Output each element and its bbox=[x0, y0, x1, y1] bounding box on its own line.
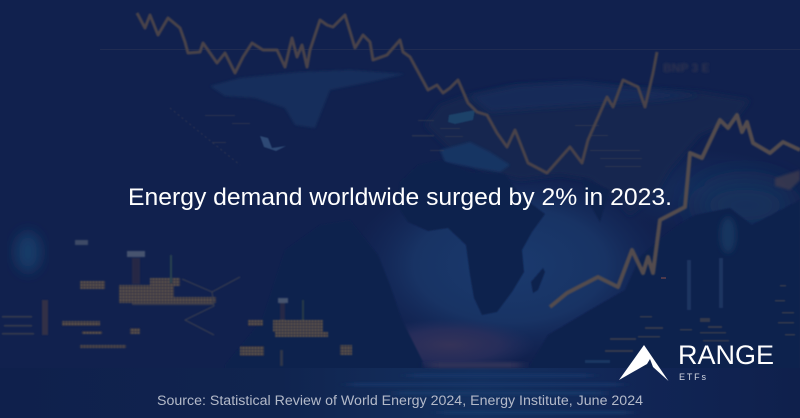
map: arctic islands bbox=[210, 70, 405, 128]
map: black sea bbox=[448, 110, 475, 124]
right coast and city silhouette bbox=[528, 200, 800, 372]
headline: Energy demand worldwide surged by 2% in 2023. bbox=[128, 184, 672, 211]
logo mountain icon bbox=[619, 345, 668, 381]
map: india bbox=[582, 178, 610, 222]
map: great lakes bbox=[260, 136, 286, 151]
map: madagascar bbox=[531, 268, 545, 293]
warm horizon glow bbox=[430, 362, 520, 368]
blue smoke plume bbox=[15, 232, 41, 272]
orange accent at right bbox=[775, 170, 800, 190]
faint horizontal line bbox=[100, 49, 800, 50]
logo subtitle: ETFs bbox=[679, 372, 706, 382]
map: siberia highlight bbox=[470, 82, 700, 112]
second stock chart line: rising on the right bbox=[550, 115, 800, 307]
logo: Range ETFs bbox=[619, 340, 774, 382]
industrial towers bbox=[661, 217, 736, 310]
logo wordmark: RANGE bbox=[678, 340, 774, 370]
offshore rig: small bbox=[240, 298, 352, 366]
source note: Source: Statistical Review of World Energy 2024, Energy Institute, June 2024 bbox=[157, 393, 644, 408]
sea bbox=[0, 368, 800, 418]
offshore rig: large bbox=[2, 240, 240, 348]
map: city lights bbox=[170, 108, 642, 167]
smoke cloud on the right bbox=[695, 180, 795, 230]
map: asia landmass bbox=[425, 84, 750, 215]
map: mediterranean bbox=[440, 142, 510, 172]
left mountain bbox=[225, 220, 425, 372]
world map bbox=[170, 70, 750, 315]
ticker label: BNP 3 E bbox=[663, 61, 709, 75]
glowing sky behind the globe bbox=[350, 150, 800, 371]
city lights lower right bbox=[585, 285, 795, 363]
stock chart line: falling across the globe bbox=[137, 13, 657, 173]
map: africa bbox=[397, 160, 545, 315]
